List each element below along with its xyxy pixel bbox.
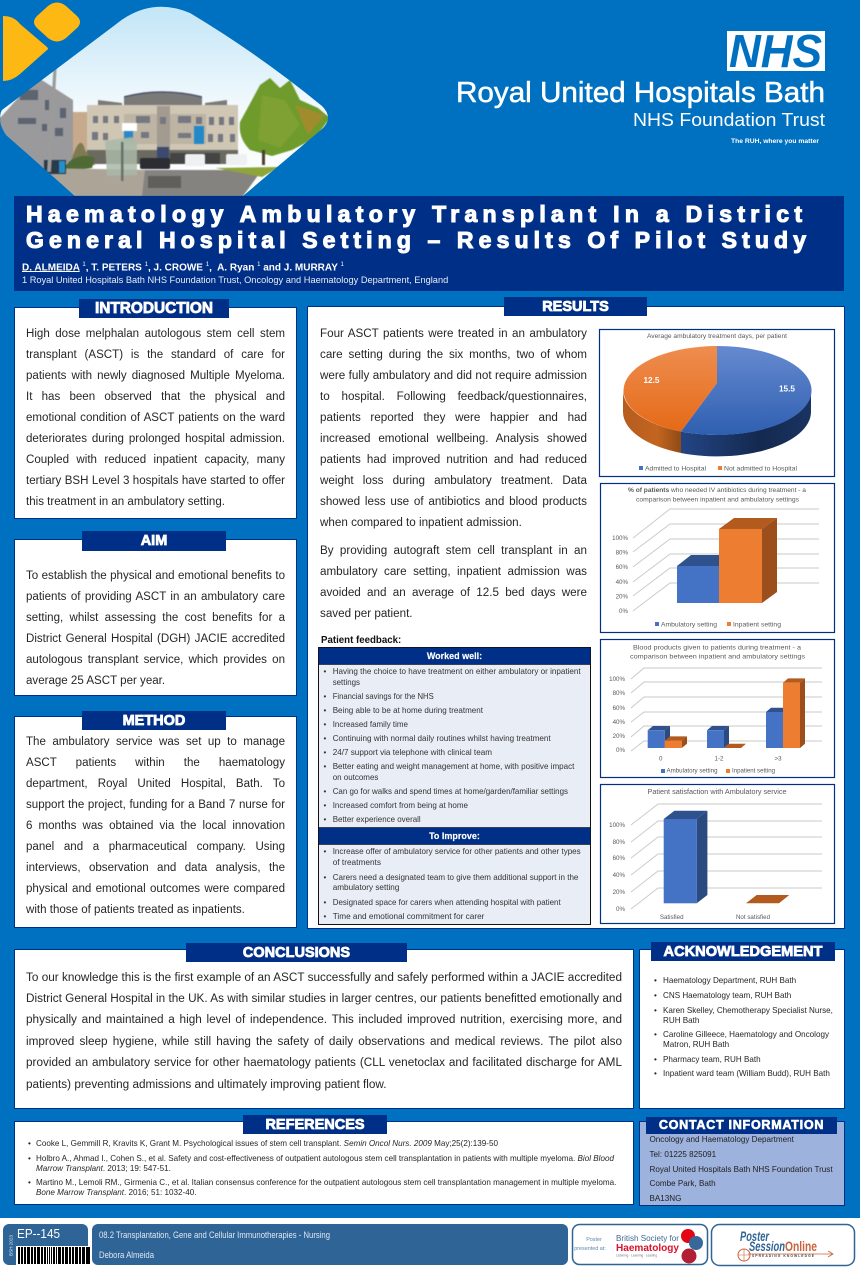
list: references: Cooke L, Gemmill R, Kravits K, Grant M. Psychological issues of stem cell transplant. Semin Oncol Nurs. 2009 May;25(2):139-50 [36, 1139, 498, 1148]
text: aim: patients of providing ASCT in an ambulatory care [26, 591, 285, 603]
bar chart: IV antibiotics: 40% [616, 579, 628, 586]
table header: to improve [318, 828, 590, 844]
list: acknowledgements: Matron, RUH Bath [663, 1040, 729, 1049]
bar chart: patient satisfaction: 100% [609, 822, 625, 829]
text: results summary: increased emotional wellbeing. Analysis showed [320, 432, 587, 445]
bar chart: patient satisfaction: 0% [616, 906, 625, 913]
text: method: 6 months was obtained via the local innovation [26, 820, 285, 832]
list: acknowledgements: • [654, 1030, 657, 1039]
text: results summary [320, 327, 587, 529]
text: introduction: It has been observed that the physical and [26, 391, 285, 403]
category and presenter bar: 08.2 Transplantation, Gene and Cellular Immunotherapies - Nursing [99, 1230, 330, 1240]
bar chart: blood products: 0% [616, 747, 625, 754]
organisation name: The RUH, where you matter [731, 138, 819, 145]
list: worked well items: • [324, 734, 326, 743]
text: results summary: when compared to inpatient admission. [320, 516, 522, 529]
text: introduction: transplant (ASCT) is the standard of care for [26, 349, 285, 361]
list: to improve items: Designated space for carers when attending hospital with patient [333, 897, 561, 907]
list: references: Holbro A., Ahmad I., Cohen S., et al. Safety and cost-effectiveness of outpatient autologous stem cell transplantation in patients with multiple myeloma. Biol Blood [36, 1154, 614, 1163]
list: references: Martino M., Lemoli RM., Girmenia C., et al. Italian consensus conference for the outpatient autologous stem cell transplantation management in multiple myeloma. [36, 1178, 616, 1187]
logo: British Society for Haematology: British Society for [616, 1234, 679, 1243]
list: to improve items: • [324, 912, 326, 921]
heading: contact information: CONTACT INFORMATION [659, 1118, 824, 1132]
text: aim: autologous transplant service, which provides on [26, 654, 285, 666]
poster title: General Hospital Setting – Results Of Pilot Study [26, 227, 806, 253]
text: results summary: to hospital. Following feedback/questionnaires, [320, 390, 587, 403]
text: method: The ambulatory service was set up to manage [26, 736, 285, 748]
list: worked well items: • [324, 801, 326, 810]
list: worked well items: • [324, 815, 326, 824]
text: introduction: High dose melphalan autologous stem cell stem [26, 328, 285, 340]
bar chart: IV antibiotics [600, 484, 834, 632]
panel: references [14, 1115, 634, 1205]
list: worked well items: Increased family time [333, 719, 408, 729]
heading: conclusions [186, 943, 407, 962]
footer graphics [3, 1224, 856, 1266]
bar chart: IV antibiotics: 80% [616, 550, 628, 556]
bar chart: blood products: Blood products given to patients during treatment - a [633, 644, 801, 652]
heading: method: METHOD [123, 713, 185, 729]
heading: results [504, 297, 647, 316]
list: worked well items: • [324, 787, 326, 796]
list: worked well items: Better eating and weight management at home, with positive impact [333, 761, 575, 771]
list: to improve items: ambulatory setting [333, 882, 400, 892]
text: method: department, Royal United Hospital, Bath. To [26, 778, 285, 790]
organisation name: NHS Foundation Trust [633, 110, 825, 130]
list: worked well items: • [324, 762, 326, 771]
text: results bed days: ambulatory care setting, inpatient admission was [320, 565, 587, 578]
text: introduction: this treatment in an ambulatory setting. [26, 496, 225, 508]
text: contact details: Oncology and Haematology Department [650, 1135, 794, 1144]
bar chart: patient satisfaction: 40% [613, 872, 625, 879]
text: conclusions: improved sleep hygiene, while still having the safety of daily observations and medical reviews. The pilot also [26, 1035, 622, 1048]
logo: Poster Session Online: SPREADING KNOWLEDGE [752, 1254, 815, 1258]
text: aim: District General Hospital (DGH) JACIE accredited [26, 633, 285, 645]
list: acknowledgements: • [654, 1069, 657, 1078]
text: method: with those of patients treated as inpatients. [26, 904, 245, 916]
bar chart: blood products: 100% [609, 676, 625, 683]
text: method: support the project, funding for a Band 7 nurse for [26, 799, 285, 811]
heading: results: RESULTS [542, 299, 609, 315]
bar chart: IV antibiotics: 100% [612, 535, 628, 542]
list: worked well items: • [324, 692, 326, 701]
bar chart: blood products: 20% [613, 733, 625, 740]
text: introduction [26, 328, 285, 508]
vehicles [140, 158, 170, 169]
list: to improve items: • [324, 873, 326, 882]
text: results summary: patients had improved nutrition and had reduced [320, 453, 587, 466]
bus shelter [105, 137, 137, 176]
text: method: ASCT patients within the haematology [26, 757, 285, 769]
text: introduction: tertiary BSH Level 3 hospitals have started to offer [26, 475, 285, 487]
text: aim: To establish the physical and emotional benefits to [26, 570, 285, 582]
table header: worked well: Worked well: [427, 651, 482, 661]
list: worked well items: on outcomes [333, 772, 378, 782]
list: acknowledgements: Pharmacy team, RUH Bath [663, 1055, 761, 1064]
authors: D. ALMEIDA 1, T. PETERS 1, J. CROWE 1, A. Ryan 1 and J. MURRAY 1 [22, 262, 344, 273]
list: worked well items: Being able to be at home during treatment [333, 705, 484, 715]
list: to improve items: of treatments [333, 857, 381, 867]
heading: conclusions: CONCLUSIONS [243, 945, 350, 961]
list: references: • [28, 1178, 31, 1187]
photo: hospital building [0, 0, 335, 196]
category and presenter bar: Debora Almeida [99, 1250, 154, 1260]
bar chart: IV antibiotics: % of patients who needed IV antibiotics during treatment - a [628, 487, 806, 494]
bar chart: blood products: 80% [613, 690, 625, 697]
bar chart: IV antibiotics: 0% [619, 608, 628, 615]
pie chart: average ambulatory treatment days: Average ambulatory treatment days, per patient [647, 333, 787, 340]
text: results summary: showed less use of antibiotics and blood products [320, 495, 587, 508]
list: worked well items: 24/7 support via telephone with clinical team [333, 747, 492, 757]
text: contact details: Combe Park, Bath [650, 1179, 716, 1188]
panel: introduction [14, 299, 297, 519]
heading: aim [82, 531, 226, 551]
bar chart: blood products: Ambulatory setting [666, 768, 718, 774]
bar chart: IV antibiotics: Ambulatory setting [661, 622, 717, 628]
text: aim: average 25 ASCT per year. [26, 675, 165, 687]
list: references: Bone Marrow Transplant. 2016; 51: 1032-40. [36, 1188, 196, 1197]
list: to improve items: Increase offer of ambulatory service for other patients and other types [333, 846, 581, 856]
pie chart: average ambulatory treatment days: Not admitted to Hospital [724, 466, 797, 472]
affiliation: 1 Royal United Hospitals Bath NHS Foundation Trust, Oncology and Haematology Department, England [22, 275, 448, 285]
bar chart: blood products: 0 [659, 756, 663, 762]
title band [14, 196, 844, 291]
text: conclusions: provided an ambulatory service for other haematology patients (CLL venetoclax and facilitated discharge for AML [26, 1056, 622, 1069]
list: worked well items: Having the choice to have treatment on either ambulatory or inpatient [333, 666, 581, 676]
panel: acknowledgement [639, 942, 845, 1109]
pie chart: average ambulatory treatment days: 15.5 [779, 384, 795, 394]
text: aim [26, 570, 286, 687]
text: conclusions: physically and maintained a high level of independence. This included improved nutrition, exercising more, and [26, 1013, 622, 1026]
list: to improve items [324, 846, 581, 921]
heading: aim: AIM [141, 533, 167, 549]
text: method: panel and a pharmaceutical company. Using [26, 841, 285, 853]
bar chart: IV antibiotics: 20% [616, 594, 628, 600]
logo: British Society for Haematology: Listening · Learning · Leading [616, 1254, 657, 1258]
bar chart: blood products: 60% [613, 705, 625, 712]
text: conclusions: To our knowledge this is the first example of an ASCT successfully and safely performed within a JACIE accredited [26, 970, 622, 984]
text: introduction: patients with newly diagnosed Multiple Myeloma. [26, 370, 285, 382]
bar chart: blood products: Inpatient setting [732, 768, 775, 774]
logo: British Society for Haematology: Poster [586, 1237, 602, 1243]
text: contact details: Tel: 01225 825091 [650, 1150, 716, 1159]
text: introduction: emotional condition of ASCT patients on the ward [26, 412, 285, 424]
text: method [26, 736, 285, 916]
list: acknowledgements: • [654, 976, 657, 985]
panel: method [14, 711, 297, 928]
logo: Poster Session Online: Online [785, 1238, 817, 1254]
text: introduction: deteriorates during prolonged hospital admission. [26, 433, 285, 445]
organisation name: Royal United Hospitals Bath [456, 77, 825, 109]
text: results bed days: By providing autograft stem cell transplant in an [320, 544, 587, 557]
list: worked well items: Financial savings for the NHS [333, 691, 434, 701]
logo: British Society for Haematology: Haematology [616, 1243, 679, 1254]
list: acknowledgements: CNS Haematology team, RUH Bath [663, 991, 791, 1000]
header graphics: hospital photo, logo, NHS branding [0, 2, 825, 196]
heading: method [82, 711, 226, 730]
poster number and barcode [3, 1224, 91, 1265]
organisation name [456, 77, 825, 145]
list: worked well items: • [324, 720, 326, 729]
text: aim: setting, whilst assessing the cost benefits for a [26, 612, 285, 624]
logo: Poster Session Online: Session [749, 1238, 785, 1254]
bar chart: blood products: 40% [613, 719, 625, 726]
list: worked well items: Better experience overall [333, 814, 421, 824]
logo: British Society for Haematology: presented at: [574, 1246, 606, 1252]
text: results bed days: saved per patient. [320, 607, 413, 620]
list: acknowledgements: Karen Skelley, Chemotherapy Specialist Nurse, [663, 1006, 833, 1015]
text: introduction: Coupled with reduced inpatient capacity, many [26, 454, 285, 466]
category and presenter bar [92, 1224, 568, 1265]
text: results summary: Four ASCT patients were treated in an ambulatory [320, 327, 587, 340]
heading: references [243, 1115, 387, 1134]
text: contact details: Royal United Hospitals Bath NHS Foundation Trust [650, 1165, 833, 1174]
list: references: • [28, 1139, 31, 1148]
heading: references: REFERENCES [265, 1117, 365, 1133]
text: conclusions [26, 970, 622, 1091]
bar chart: blood products: comparison between inpatient and ambulatory settings [630, 654, 806, 660]
text: results summary: patients reported they were happier and had [320, 411, 587, 424]
text: method: physical and emotional outcomes were compared [26, 883, 285, 895]
bar chart: patient satisfaction: 80% [613, 839, 625, 846]
list: acknowledgements: RUH Bath [663, 1016, 699, 1025]
bar chart: IV antibiotics: 60% [616, 564, 628, 571]
bar chart: IV antibiotics: comparison between inpatient and ambulatory settings [636, 496, 800, 504]
text: conclusions: District General Hospital in the UK. As with similar studies in larger centres, our patients benefitted emotionally and [26, 992, 622, 1005]
pie chart: average ambulatory treatment days [600, 330, 834, 476]
text: contact details: BA13NG [650, 1194, 681, 1203]
text: method: interviews, observation and data analysis, the [26, 862, 285, 874]
bar chart: blood products: >3 [774, 756, 782, 762]
road and paving [50, 168, 146, 196]
heading: acknowledgement: ACKNOWLEDGEMENT [664, 944, 822, 960]
bar chart: patient satisfaction [600, 784, 834, 924]
list: worked well items [324, 666, 581, 824]
list: acknowledgements: • [654, 1055, 657, 1064]
poster number and barcode: EP--145 [17, 1226, 60, 1241]
list: acknowledgements: • [654, 991, 657, 1000]
text: results summary: care setting during the six months, two of whom [320, 348, 587, 361]
list: worked well items: settings [333, 677, 360, 687]
list: references: • [28, 1154, 31, 1163]
list: worked well items: Increased comfort from being at home [333, 800, 468, 810]
text: results bed days [320, 544, 587, 620]
bar chart: patient satisfaction: Not satisfied [736, 914, 771, 921]
text: results summary: were fully ambulatory and did not require admission [320, 369, 587, 382]
list: references [28, 1139, 616, 1197]
panel: conclusions [14, 943, 634, 1109]
bar chart: patient satisfaction: 60% [613, 855, 625, 862]
tree [240, 78, 330, 156]
poster title [26, 201, 807, 254]
table header: to improve: To Improve: [429, 831, 480, 841]
text: contact details [650, 1135, 833, 1203]
NHS logo: NHS [729, 25, 822, 77]
panel: contact information [639, 1117, 845, 1206]
logo: yellow diamonds [3, 2, 80, 81]
bar chart: patient satisfaction: Satisfied [660, 914, 684, 921]
text: results bed days: avoided and an average of 12.5 bed days were [320, 586, 587, 599]
logo: British Society for Haematology [572, 1224, 708, 1264]
list: to improve items: • [324, 898, 326, 907]
list: to improve items: Carers need a designated team to give them additional support in the [333, 872, 579, 882]
poster title: Haematology Ambulatory Transplant In a District [26, 201, 802, 227]
list: worked well items: Continuing with normal daily routines whilst having treatment [333, 733, 551, 743]
panel: aim [14, 531, 297, 696]
poster number and barcode: BSH 2023 [8, 1235, 14, 1256]
list: to improve items: Time and emotional commitment for carer [333, 911, 485, 921]
table header: worked well [318, 648, 590, 664]
list: acknowledgements: Caroline Gilleece, Haematology and Oncology [663, 1030, 829, 1039]
logo: Poster Session Online: Poster [740, 1228, 770, 1244]
list: worked well items: • [324, 706, 326, 715]
list: worked well items: Can go for walks and spend times at home/garden/familiar settings [333, 786, 568, 796]
bar chart: blood products: 1-2 [715, 756, 724, 762]
bar chart: patient satisfaction: Patient satisfaction with Ambulatory service [648, 789, 787, 796]
list: acknowledgements: • [654, 1006, 657, 1015]
bar chart: IV antibiotics: Inpatient setting [733, 622, 781, 628]
pie chart: average ambulatory treatment days: Admitted to Hospital [645, 466, 706, 472]
list: worked well items: • [324, 748, 326, 757]
logo: Poster Session Online [712, 1224, 854, 1266]
pie chart: average ambulatory treatment days: 12.5 [644, 376, 660, 385]
list: to improve items: • [324, 847, 326, 856]
list: acknowledgements [654, 976, 833, 1078]
list: acknowledgements: Inpatient ward team (William Budd), RUH Bath [663, 1069, 830, 1078]
heading: introduction: INTRODUCTION [95, 300, 213, 317]
heading: patient feedback: Patient feedback: [321, 635, 401, 646]
bar chart: patient satisfaction: 20% [613, 889, 625, 896]
bar chart: blood products [600, 640, 834, 778]
text: conclusions: patients) preventing admissions and ultimately improving patient flow. [26, 1078, 387, 1091]
list: acknowledgements: Haematology Department, RUH Bath [663, 976, 796, 985]
list: worked well items: • [324, 667, 326, 676]
table: patient feedback [318, 648, 590, 924]
panel: results [307, 297, 845, 929]
text: results summary: weight loss during ambulatory treatment. Data [320, 474, 587, 487]
list: references: Marrow Transplant. 2013; 19: 547-51. [36, 1164, 171, 1173]
